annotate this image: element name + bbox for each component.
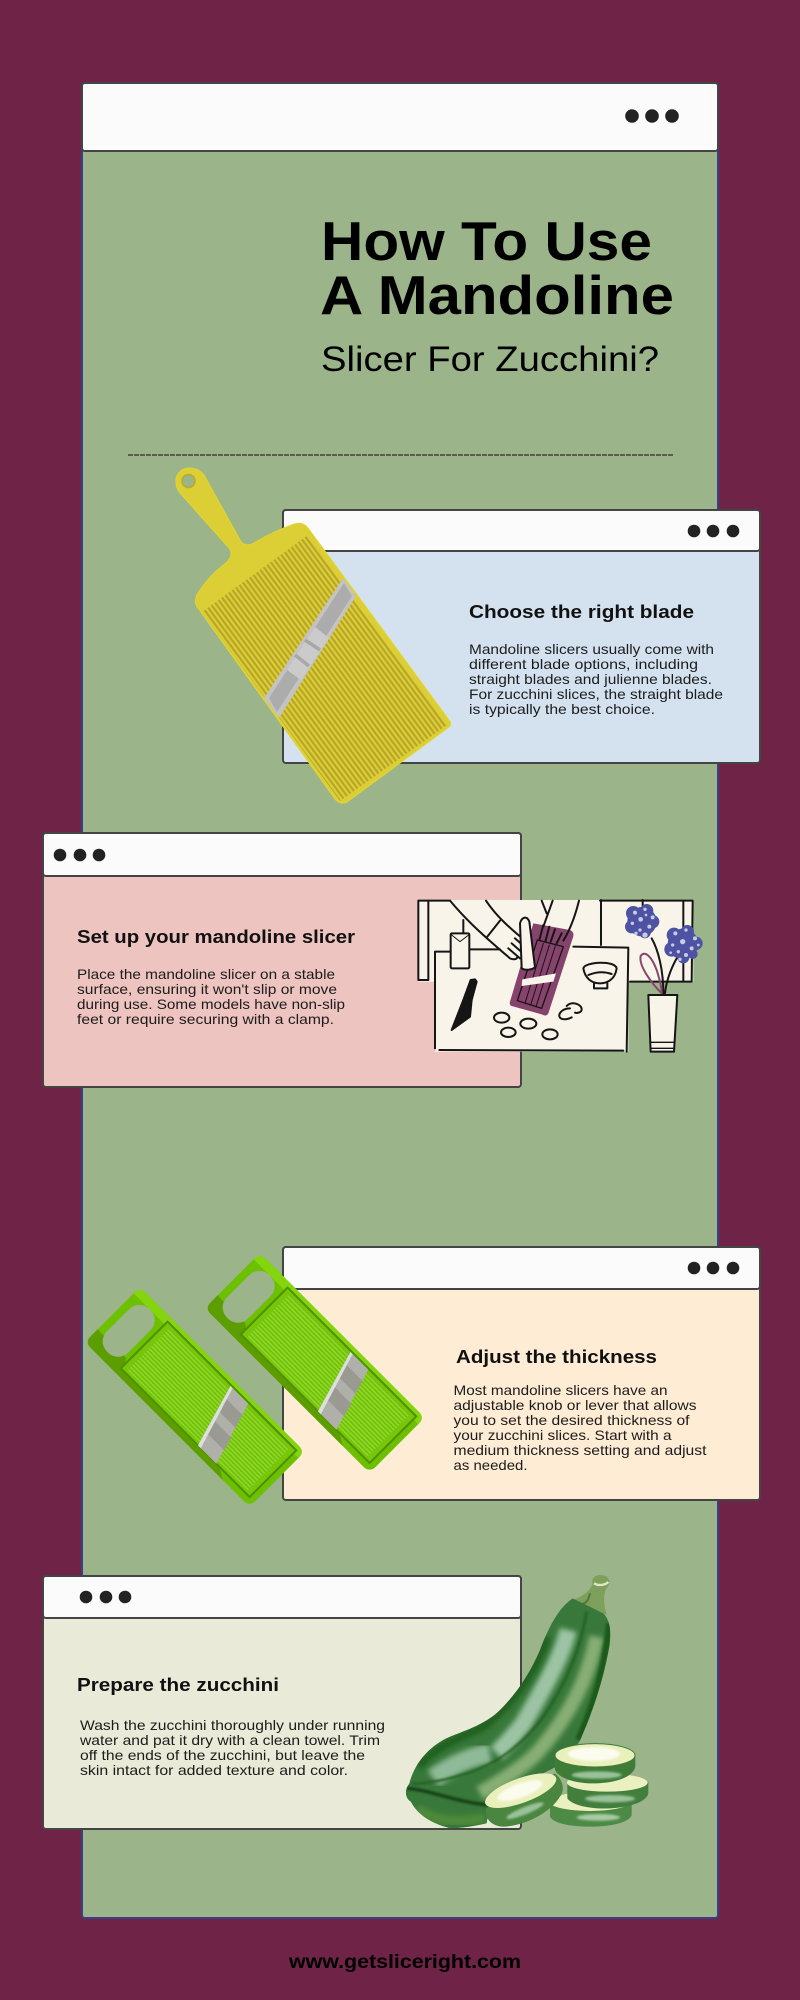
text block: prepare description: skin intact for added texture and color.	[80, 1762, 348, 1778]
icon: yellow mandoline slicer	[176, 468, 450, 803]
text block: blade description	[469, 641, 723, 717]
text block: prepare description	[79, 1717, 385, 1778]
title: Slicer For Zucchini?	[321, 340, 659, 379]
text block: blade description: different blade options, including	[469, 656, 698, 672]
front slice	[481, 1766, 563, 1827]
title	[320, 210, 674, 379]
vase	[648, 995, 677, 1052]
panel: prepare the zucchini	[43, 1576, 521, 1829]
illustration: hands slicing on a table	[418, 900, 703, 1052]
text block: set up description: surface, ensuring it won't slip or move	[77, 981, 337, 997]
panel: choose the right blade	[283, 510, 760, 763]
bowl	[583, 963, 617, 983]
text block: set up description: feet or require securing with a clamp.	[77, 1011, 334, 1027]
title: A Mandoline	[320, 264, 674, 326]
stem	[574, 1575, 609, 1615]
middle slice	[567, 1774, 648, 1808]
text block: prepare description: water and pat it dry with a clean towel. Trim	[79, 1732, 380, 1748]
stems and leaf	[652, 938, 677, 993]
text block: blade description: For zucchini slices, the straight blade	[469, 686, 723, 702]
text block: adjust description: you to set the desired thickness of	[454, 1412, 690, 1428]
panel: set up your mandoline slicer	[43, 833, 521, 1087]
text block: adjust description: medium thickness setting and adjust	[454, 1442, 707, 1458]
text block: blade description: Mandoline slicers usually come with	[469, 641, 714, 657]
top slice	[555, 1744, 635, 1783]
text block: set up description: during use. Some models have non-slip	[77, 996, 345, 1012]
lower slice	[549, 1792, 632, 1827]
text block: blade description: straight blades and julienne blades.	[469, 671, 712, 687]
zucchini body	[406, 1598, 610, 1828]
heading: adjust: Adjust the thickness	[456, 1346, 657, 1367]
knife	[452, 979, 477, 1030]
zucchini piece	[520, 918, 535, 970]
right arm	[539, 901, 579, 943]
text block: adjust description	[454, 1382, 707, 1473]
icon: green slicer right	[205, 1253, 425, 1473]
text block: adjust description: your zucchini slices. Start with a	[454, 1427, 672, 1443]
main window header bar	[82, 83, 718, 151]
text block: set up description: Place the mandoline slicer on a stable	[77, 966, 335, 982]
main green panel	[82, 120, 718, 1918]
heading: prepare: Prepare the zucchini	[77, 1674, 279, 1695]
illustration: zucchini with slices	[406, 1575, 648, 1828]
left arm	[450, 901, 529, 959]
text block: blade description: is typically the best choice.	[469, 701, 655, 717]
text block: adjust description: as needed.	[454, 1457, 528, 1473]
purple slicer	[510, 923, 573, 1015]
heading: choose the right blade: Choose the right blade	[469, 601, 694, 622]
title: How To Use	[321, 210, 652, 272]
icon: green slicer left	[85, 1287, 305, 1507]
text block: prepare description: off the ends of the zucchini, but leave the	[80, 1747, 365, 1763]
flowers	[625, 904, 703, 963]
text block: adjust description: Most mandoline slicers have an	[454, 1382, 668, 1398]
text block: adjust description: adjustable knob or lever that allows	[454, 1397, 696, 1413]
heading: set up: Set up your mandoline slicer	[77, 926, 355, 947]
glass	[451, 933, 469, 968]
text block: prepare description: Wash the zucchini thoroughly under running	[80, 1717, 385, 1733]
panel: adjust the thickness	[283, 1247, 760, 1500]
zucchini slices	[494, 1013, 509, 1023]
footer website address: www.getsliceright.com	[288, 1952, 521, 1973]
text block: set up description	[77, 966, 345, 1027]
